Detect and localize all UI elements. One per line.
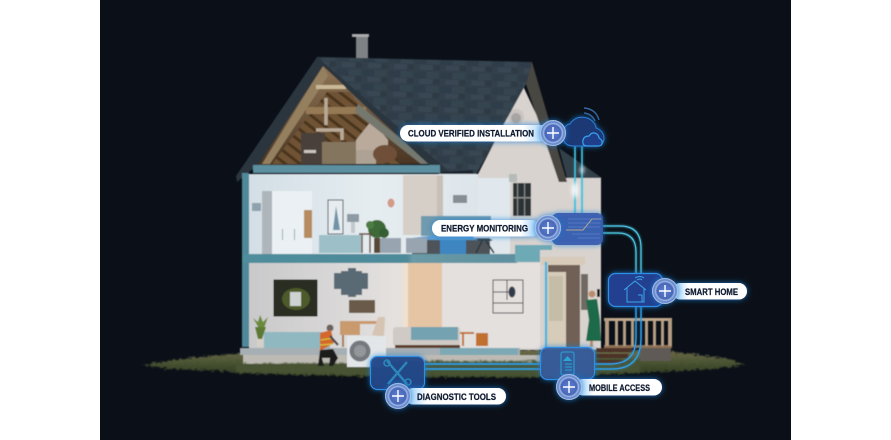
label pill <box>405 388 506 404</box>
vertical wall line <box>545 262 547 348</box>
attic interior <box>258 66 437 165</box>
plus button <box>535 215 561 241</box>
cloud to energy lines <box>575 146 582 214</box>
canvas art with wall painting <box>274 280 317 316</box>
right section wall <box>478 86 601 350</box>
label text: MOBILE ACCESS <box>589 383 650 393</box>
floor slab <box>242 245 552 263</box>
icon: energy box <box>552 213 603 245</box>
upper floor walls <box>249 174 510 256</box>
chair <box>359 234 372 253</box>
roof eave front <box>441 170 473 181</box>
left outer wall <box>242 173 249 347</box>
roof right fascia <box>526 62 567 182</box>
vent <box>509 174 517 182</box>
bed <box>412 216 491 254</box>
label text: CLOUD VERIFIED INSTALLATION <box>408 128 534 138</box>
air handler <box>322 142 368 164</box>
gable window <box>508 109 524 125</box>
wall shelf <box>493 280 523 313</box>
exterior window <box>513 183 531 216</box>
porch railing <box>604 318 672 348</box>
connector lines <box>424 146 641 369</box>
plus button <box>556 374 582 400</box>
wardrobe <box>262 191 312 254</box>
label text: SMART HOME <box>685 287 738 297</box>
callout: energy monitoring <box>432 213 603 245</box>
ground floor walls <box>249 263 540 348</box>
ground: grass <box>142 350 746 377</box>
label pill <box>400 125 550 142</box>
wall ornament <box>388 198 394 208</box>
chimney <box>352 34 369 62</box>
porch stone base <box>640 347 671 361</box>
light highlights <box>572 166 584 198</box>
desk <box>340 321 378 347</box>
background panel <box>100 0 791 440</box>
five panel art <box>334 268 368 297</box>
label pill <box>575 379 662 396</box>
roof left fascia <box>236 57 452 182</box>
small right roof <box>559 148 602 178</box>
icon: house box <box>608 274 662 306</box>
label text: DIAGNOSTIC TOOLS <box>417 392 496 402</box>
porch steps <box>596 348 632 364</box>
wall mirror <box>349 300 375 313</box>
smart home to mobile lines <box>594 306 641 369</box>
label text: ENERGY MONITORING <box>441 224 528 234</box>
potted plant <box>253 315 268 347</box>
icon: phone box <box>540 348 594 380</box>
air conditioner unit <box>347 336 386 367</box>
front grass <box>236 358 640 377</box>
sofa <box>393 327 460 348</box>
desk chair <box>372 317 385 337</box>
entrance <box>540 250 600 348</box>
mobile to diagnostic lines <box>424 364 540 369</box>
attic ducts <box>316 98 342 140</box>
sideboard <box>319 235 361 253</box>
plus button <box>385 383 411 409</box>
wall lamp <box>252 203 261 211</box>
desk chair <box>476 240 494 253</box>
painting <box>328 200 343 234</box>
callout: mobile access <box>540 348 662 400</box>
ottomans <box>380 238 427 253</box>
side table <box>460 332 488 346</box>
plus button <box>652 278 678 304</box>
callout: smart home <box>608 274 747 306</box>
house illustration <box>236 34 672 377</box>
icon: cloud <box>563 108 604 146</box>
technician <box>318 324 338 366</box>
table lamp <box>347 214 359 233</box>
callout: cloud verified installation <box>400 108 604 146</box>
media cabinet <box>264 332 330 348</box>
icon: tools box <box>370 356 424 390</box>
woman <box>586 289 601 347</box>
label pill <box>672 283 747 300</box>
insulated rafters <box>355 104 432 164</box>
attic floor band <box>253 165 440 173</box>
main roof <box>317 57 532 181</box>
energy to smart home lines <box>603 226 641 274</box>
ground floor slab <box>240 348 543 364</box>
plus button <box>540 120 566 146</box>
callout: diagnostic tools <box>370 356 506 409</box>
thermostat <box>453 195 467 203</box>
label pill <box>432 220 540 236</box>
furnace <box>301 133 325 164</box>
plant <box>366 220 389 253</box>
